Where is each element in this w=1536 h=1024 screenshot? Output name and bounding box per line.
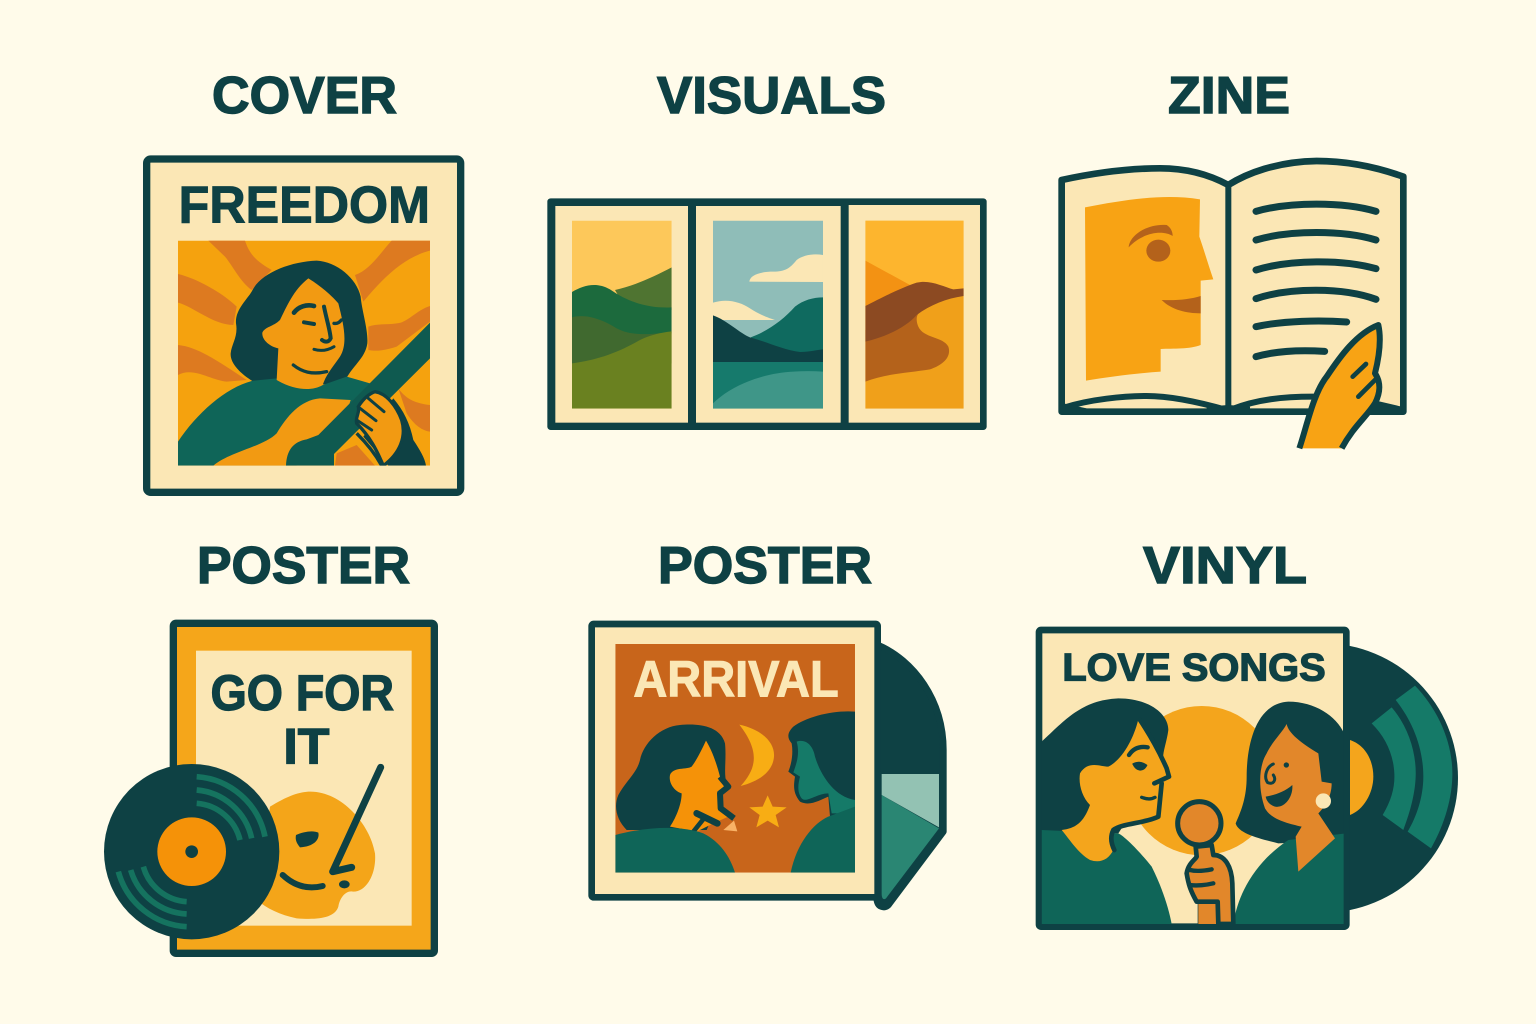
- heading: COVER: COVER: [212, 67, 397, 125]
- album illustration: duet: [1042, 698, 1346, 924]
- zine text lines: [1256, 204, 1376, 357]
- torso: [178, 377, 370, 466]
- face: [262, 278, 344, 389]
- left figure: [616, 725, 727, 830]
- hand: [363, 398, 426, 466]
- panel: vinyl Love Songs: [1039, 630, 1458, 927]
- cover title: FREEDOM: [179, 177, 430, 235]
- hair: [231, 261, 367, 385]
- moon: [739, 725, 774, 786]
- heading: POSTER middle: POSTER: [658, 537, 872, 595]
- microphone and hand: [1178, 802, 1233, 924]
- earring: [1316, 793, 1331, 809]
- album title: LOVE SONGS: [1062, 646, 1326, 690]
- right figure: [788, 711, 855, 817]
- panel: visuals triptych: [547, 198, 987, 430]
- right singer: [1236, 702, 1346, 843]
- zine illustration: profile face: [1085, 197, 1213, 381]
- heading: ZINE: ZINE: [1168, 67, 1290, 125]
- vinyl disc: [1189, 643, 1458, 913]
- hand: [1299, 325, 1380, 448]
- guitar neck: [286, 323, 430, 466]
- heading: VISUALS: VISUALS: [657, 67, 886, 125]
- heading: VINYL: VINYL: [1143, 537, 1307, 595]
- landscape: lake and mountains: [713, 221, 823, 409]
- title: ARRIVAL: [633, 651, 839, 708]
- vinyl record: [104, 764, 279, 939]
- poster illustration: [615, 644, 855, 873]
- cover illustration: guitarist: [178, 241, 430, 466]
- panel: poster Go For It: IT: [283, 718, 329, 774]
- landscape: green hills: [572, 221, 672, 409]
- panel: poster Go For It: [104, 623, 434, 953]
- poster title: GO FOR: [211, 665, 394, 721]
- left singer: [1042, 698, 1168, 833]
- panel: zine open book: [1062, 161, 1403, 448]
- sun: [1141, 706, 1255, 855]
- record sleeve behind poster: [875, 645, 943, 910]
- poster illustration: face: [257, 767, 381, 919]
- panel: poster Arrival: [592, 624, 943, 910]
- star: [749, 795, 787, 827]
- panel: album cover Freedom: [147, 159, 461, 492]
- landscape: desert dunes: [865, 221, 964, 409]
- guitar body: [213, 398, 351, 466]
- heading: POSTER left: POSTER: [197, 537, 410, 595]
- book spine and page curves: [1065, 185, 1313, 412]
